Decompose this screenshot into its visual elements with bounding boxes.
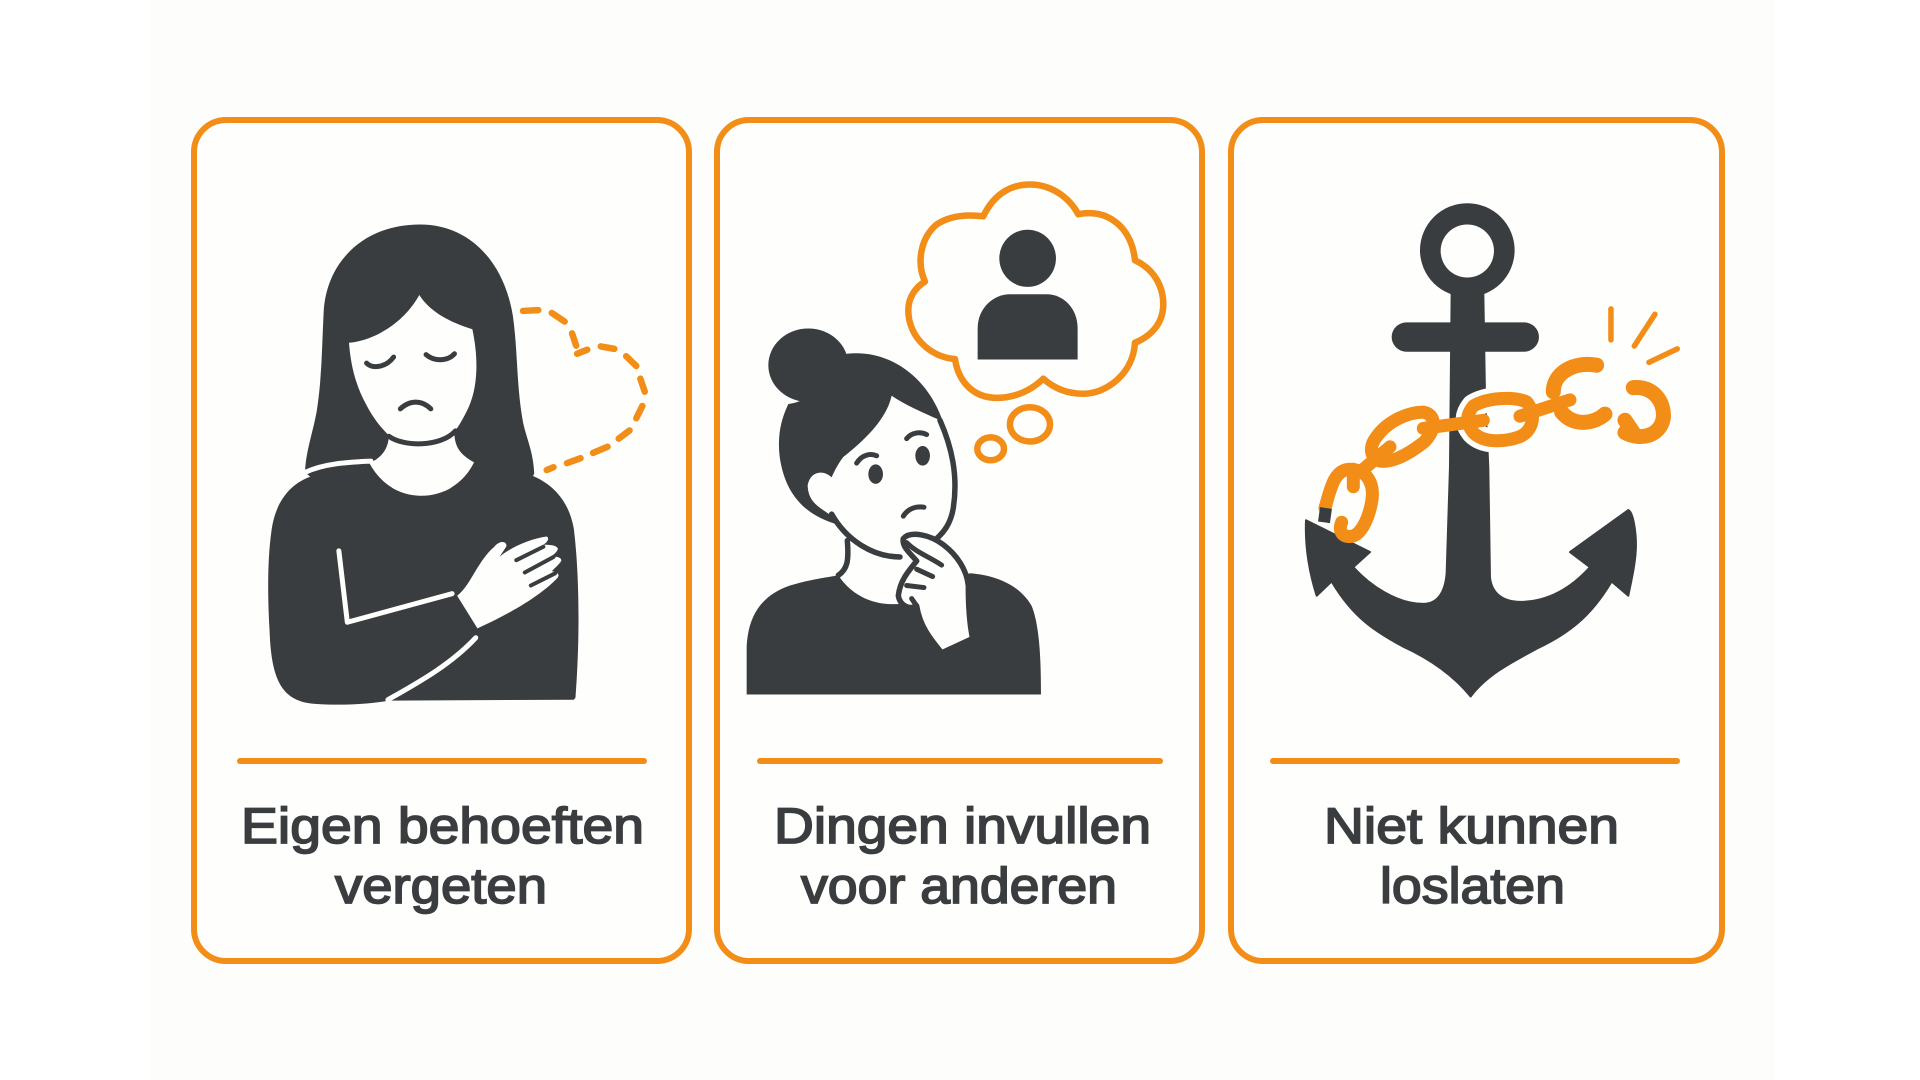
finger lines [516, 547, 555, 586]
heading: loslaten [1380, 858, 1565, 914]
finger lines [907, 543, 942, 606]
heading: Niet kunnen [1324, 798, 1619, 854]
chain link bottom [1325, 469, 1372, 537]
neck line [838, 541, 848, 575]
chain link 2 [1360, 412, 1433, 472]
chain [1324, 309, 1677, 537]
eyebrows and mouth [857, 433, 927, 516]
chain link 3 [1423, 398, 1570, 441]
thought cloud [908, 184, 1163, 398]
panel border [717, 120, 1202, 961]
heading: voor anderen [801, 858, 1117, 914]
chin line [389, 431, 455, 444]
divider [757, 758, 1163, 764]
thought bubbles [977, 407, 1050, 460]
panel: niet kunnen loslaten [1231, 120, 1722, 961]
shoulder line [306, 461, 371, 472]
broken link right [1625, 387, 1663, 437]
icon: thinking woman with thought bubble [747, 184, 1163, 694]
body [268, 463, 579, 705]
broken link left [1553, 364, 1605, 422]
sad mouth [400, 402, 431, 409]
eyes [868, 446, 930, 484]
face [349, 295, 476, 443]
panel border [194, 120, 689, 961]
icon: woman with hand on chest [268, 224, 645, 705]
heading: Eigen behoeften [241, 798, 644, 854]
hair [305, 224, 534, 488]
arm outline [339, 551, 452, 622]
hand [457, 537, 561, 628]
panel: eigen behoeften vergeten [194, 120, 689, 961]
sleeve line [388, 638, 476, 700]
face [808, 396, 955, 557]
hair [779, 353, 942, 524]
heading: vergeten [335, 858, 547, 914]
divider [237, 758, 647, 764]
person in cloud [978, 230, 1078, 359]
closed eye left [367, 357, 394, 367]
closed eye right [426, 354, 454, 360]
heading: Dingen invullen [774, 798, 1151, 854]
anchor ring [1420, 203, 1515, 297]
panel: dingen invullen voor anderen [717, 120, 1202, 961]
divider [1270, 758, 1680, 764]
anchor crossbar [1392, 322, 1539, 352]
dashed heart [523, 310, 645, 470]
face outline [832, 420, 955, 557]
chain halo [1468, 398, 1532, 441]
bun [768, 328, 848, 402]
break sparks [1611, 309, 1677, 362]
panel border [1231, 120, 1722, 961]
body [747, 573, 1041, 694]
hand on chin [898, 534, 973, 653]
icon: anchor with breaking chain [1306, 203, 1677, 696]
neck [369, 430, 474, 496]
anchor body [1306, 292, 1636, 696]
chain end [1324, 508, 1326, 522]
